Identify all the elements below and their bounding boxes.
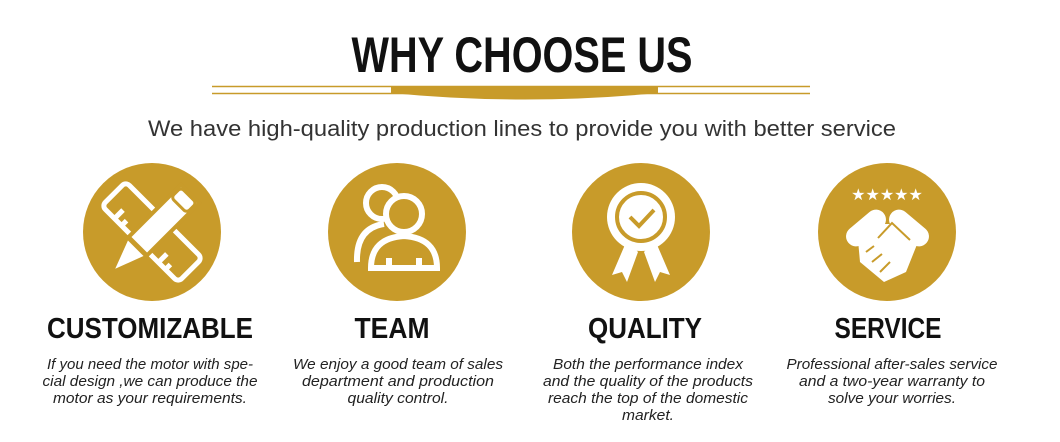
column: quality: and the quality of the products — [543, 374, 753, 390]
column: customizable: CUSTOMIZABLE — [47, 313, 253, 345]
column: service — [786, 313, 998, 407]
title underline — [212, 86, 810, 100]
subtitle: We have high-quality production lines to provide you with better service — [148, 116, 896, 141]
column: team: department and production — [302, 374, 494, 390]
icon: award ribbon — [572, 163, 710, 301]
column: service: and a two-year warranty to — [799, 374, 985, 390]
column: service: SERVICE — [834, 313, 942, 345]
column: customizable: motor as your requirements. — [53, 391, 247, 407]
column: team: We enjoy a good team of sales — [293, 357, 503, 373]
icon: handshake with stars — [818, 163, 956, 301]
icon: handshake with stars: ★★★★★ — [851, 185, 923, 204]
column: quality: reach the top of the domestic — [548, 391, 749, 407]
column: quality: Both the performance index — [553, 357, 744, 373]
icon: team — [328, 163, 466, 301]
icon: pencil and ruler — [83, 163, 221, 301]
title: WHY CHOOSE US — [352, 27, 692, 83]
column: quality: QUALITY — [588, 313, 702, 345]
column: quality — [543, 313, 753, 424]
column: customizable: If you need the motor with spe- — [47, 357, 253, 373]
column: service: Professional after-sales service — [786, 357, 998, 373]
column: service: solve your worries. — [828, 391, 956, 407]
column: quality: market. — [622, 408, 674, 424]
column: team: quality control. — [348, 391, 448, 407]
column: customizable — [42, 313, 258, 407]
column: team: TEAM — [354, 313, 430, 345]
column: customizable: cial design ,we can produce the — [42, 374, 258, 390]
column: team — [293, 313, 503, 407]
